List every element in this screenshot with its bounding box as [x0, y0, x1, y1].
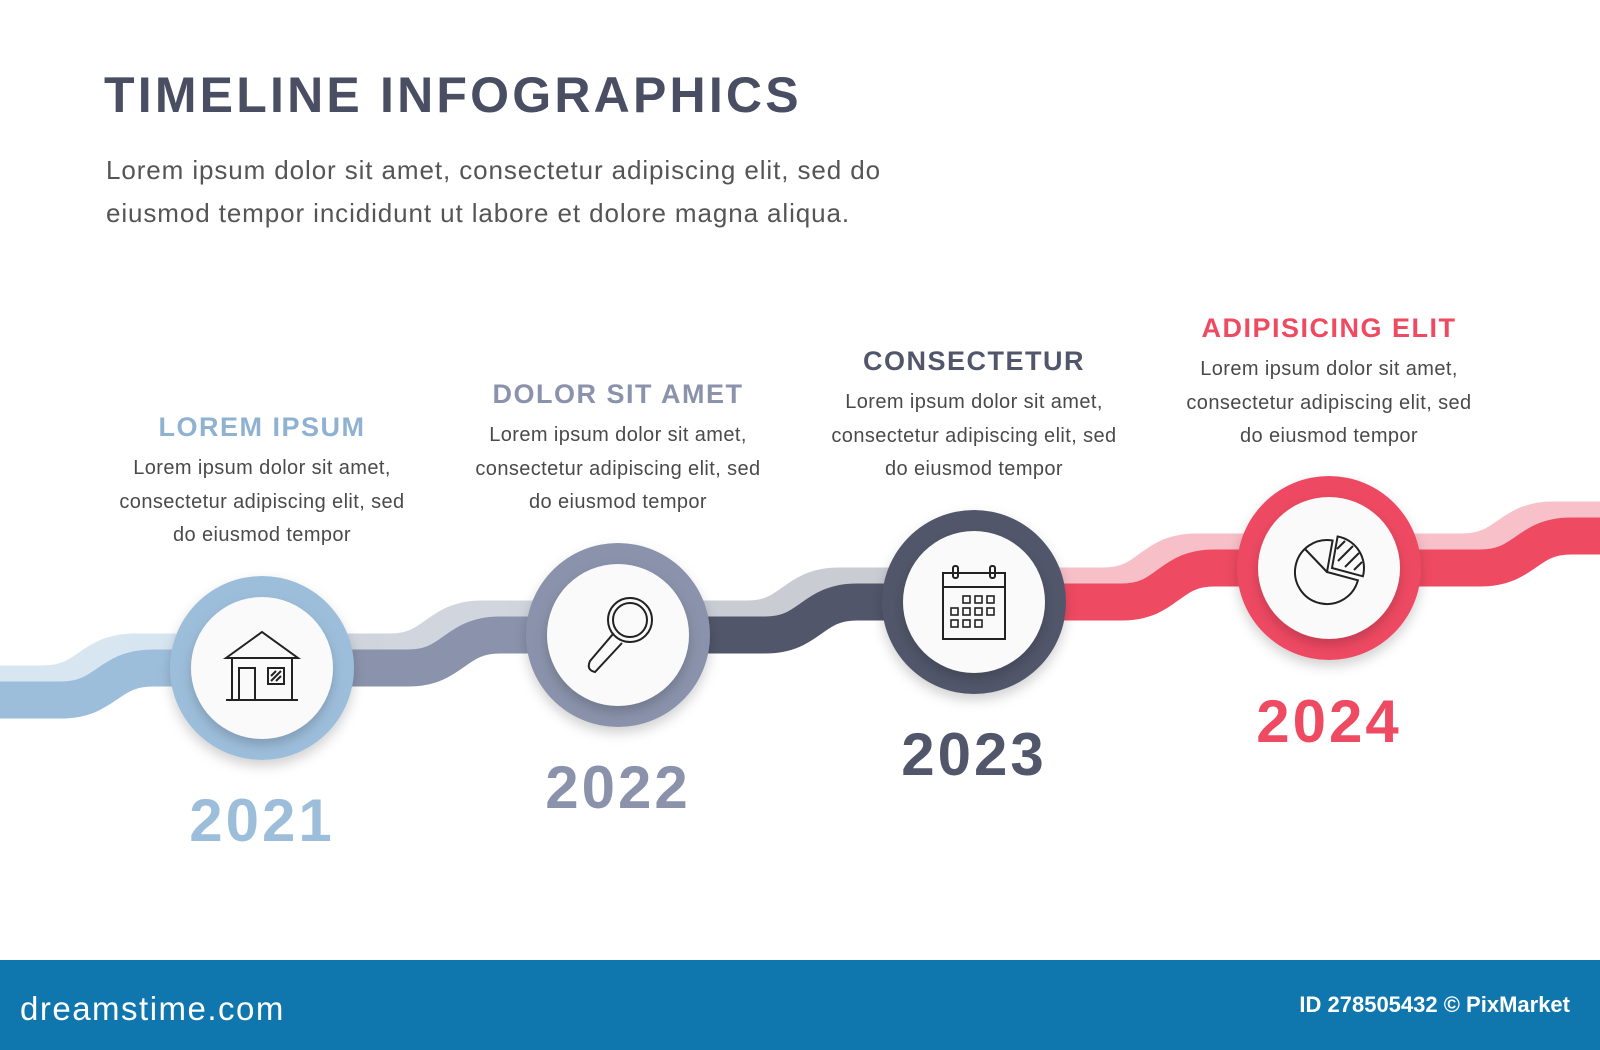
step 2 text: DOLOR SIT AMET — [492, 379, 744, 409]
band main — [0, 536, 1600, 700]
step 3 text: do eiusmod tempor — [885, 458, 1063, 480]
circle 2023 — [882, 510, 1066, 694]
step 2 text — [475, 379, 761, 513]
year 2021: 2021 — [189, 787, 335, 854]
circle 2021 — [170, 576, 354, 760]
step 4 text: do eiusmod tempor — [1240, 425, 1418, 447]
step 1 text — [119, 412, 405, 546]
step 4 text: consectetur adipiscing elit, sed — [1186, 392, 1472, 414]
icon: house — [226, 632, 298, 700]
step 4 text — [1186, 313, 1472, 447]
step 3 text: Lorem ipsum dolor sit amet, — [845, 391, 1103, 413]
year 2022: 2022 — [545, 754, 691, 821]
circle 2024 — [1237, 476, 1421, 660]
step 2 text: do eiusmod tempor — [529, 491, 707, 513]
step 3 text — [831, 346, 1117, 480]
year 2024: 2024 — [1256, 688, 1402, 755]
step 3 text: consectetur adipiscing elit, sed — [831, 425, 1117, 447]
step 3 text: CONSECTETUR — [863, 346, 1085, 376]
step 4 text: Lorem ipsum dolor sit amet, — [1200, 358, 1458, 380]
subtitle — [106, 155, 881, 228]
icon: pie chart — [1295, 536, 1364, 604]
icon: magnifier — [589, 598, 652, 672]
step 2 text: consectetur adipiscing elit, sed — [475, 458, 761, 480]
step 4 text: ADIPISICING ELIT — [1201, 313, 1457, 343]
subtitle: Lorem ipsum dolor sit amet, consectetur adipiscing elit, sed do — [106, 155, 881, 185]
step 1 text: do eiusmod tempor — [173, 524, 351, 546]
footer logo: dreamstime.com — [20, 990, 285, 1027]
footer id: ID 278505432 © PixMarket — [1299, 992, 1570, 1017]
year 2023: 2023 — [901, 721, 1047, 788]
step 1 text: Lorem ipsum dolor sit amet, — [133, 457, 391, 479]
step 1 text: consectetur adipiscing elit, sed — [119, 491, 405, 513]
icon: calendar — [943, 566, 1005, 639]
footer banner — [0, 960, 1600, 1050]
step 1 text: LOREM IPSUM — [158, 412, 366, 442]
title: TIMELINE INFOGRAPHICS — [104, 67, 802, 123]
circle 2022 — [526, 543, 710, 727]
subtitle: eiusmod tempor incididunt ut labore et dolore magna aliqua. — [106, 198, 850, 228]
band light copies — [0, 520, 1600, 684]
step 2 text: Lorem ipsum dolor sit amet, — [489, 424, 747, 446]
